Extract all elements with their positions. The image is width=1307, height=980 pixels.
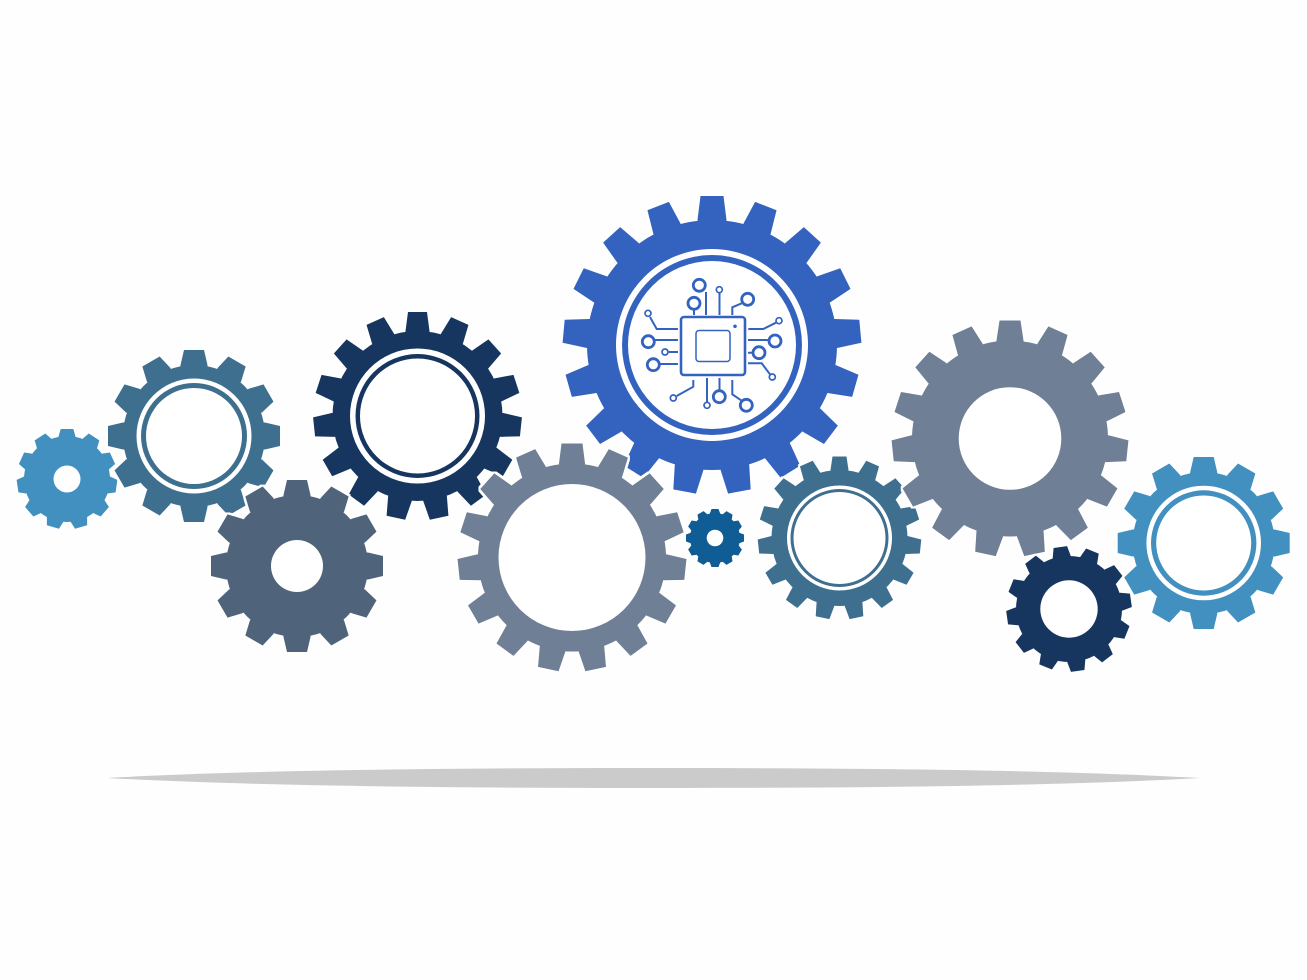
small circuit nodes [645, 287, 782, 408]
gear: small light blue [16, 429, 118, 529]
circuit nodes [642, 279, 781, 411]
circuit traces [650, 292, 777, 402]
chip body [681, 317, 745, 375]
gear: teal ring right [758, 456, 921, 620]
gear: teal ring left [108, 350, 280, 522]
chip dot [733, 324, 737, 328]
gear: light blue ring right [1118, 457, 1290, 629]
gear: tiny dark blue [686, 509, 744, 567]
gear: dark slate [211, 480, 383, 652]
icon: microchip circuit [642, 279, 782, 411]
gear: main blue with chip [562, 196, 862, 494]
ground shadow [107, 768, 1200, 788]
gear: small navy right [1006, 546, 1132, 672]
gear: large grey centre [457, 444, 687, 672]
chip core [696, 330, 730, 362]
gear: large grey right [891, 320, 1129, 557]
gear: navy ring [313, 312, 522, 520]
